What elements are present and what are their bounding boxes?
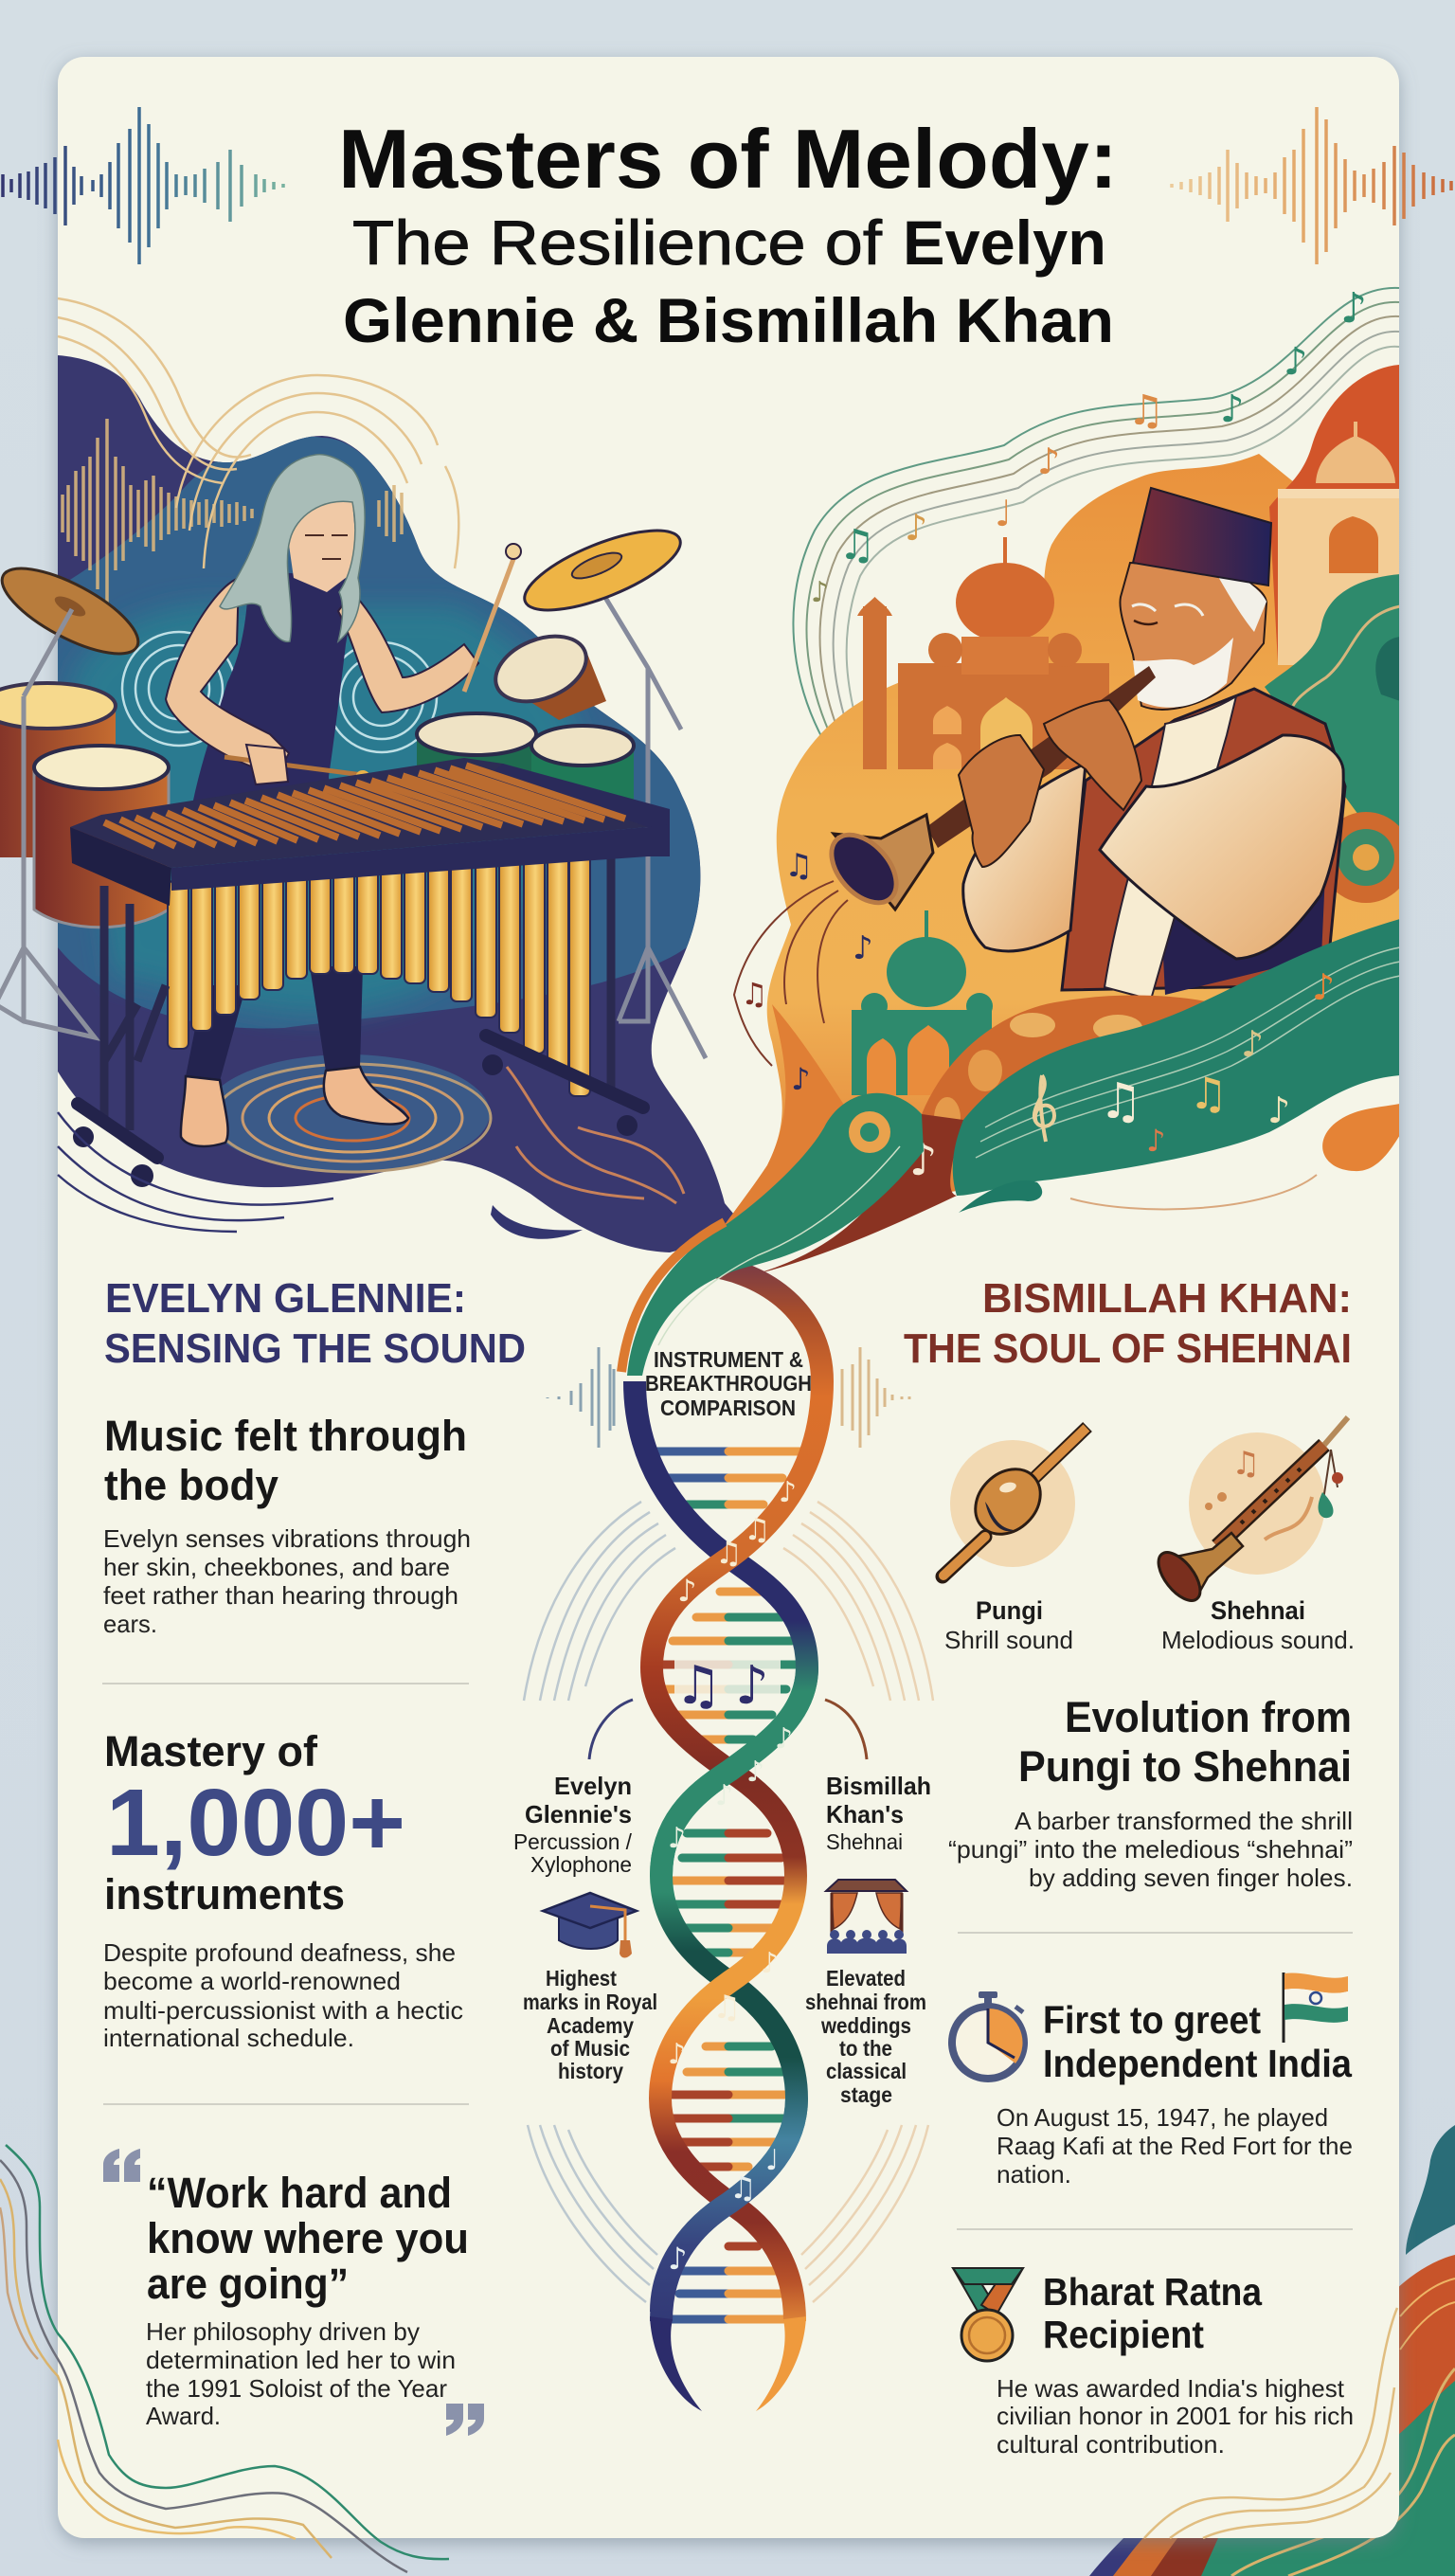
comparison heading: BREAKTHROUGH (645, 1371, 812, 1396)
left waveform (3, 107, 283, 264)
right comparison column: stage (840, 2082, 892, 2107)
music felt through the body: her skin, cheekbones, and bare (103, 1553, 450, 1581)
icon: pungi (943, 1427, 1087, 1576)
left comparison column: of Music (550, 2036, 630, 2061)
music felt through the body (103, 1412, 471, 1638)
independent India: Independent India (1043, 2042, 1352, 2085)
right comparison column (805, 1700, 931, 2107)
sound stream from the bell (734, 881, 848, 1066)
corner ribbons outside the card (1089, 2125, 1455, 2576)
small waveforms (548, 1347, 614, 1448)
title: Glennie & Bismillah Khan (343, 285, 1114, 355)
icon: stopwatch (952, 1991, 1024, 2079)
sound arcs above the blob (58, 298, 458, 568)
right comparison column: Shehnai (826, 1829, 903, 1854)
evolution text: A barber transformed the shrill (1015, 1807, 1353, 1835)
helix rungs (644, 1451, 805, 2319)
quote: Award. (146, 2402, 221, 2430)
waveform inside blob (63, 419, 402, 608)
panel: Evelyn Glennie text (102, 1275, 526, 2436)
heading (104, 1275, 526, 1372)
floating notes: ♫ (838, 521, 875, 569)
flowing ribbons (748, 919, 1400, 1276)
ribbon notes: ♫ (1099, 1073, 1143, 1130)
quote: Her philosophy driven by (146, 2317, 420, 2346)
icon: mortarboard (543, 1893, 637, 1957)
notes on helix (668, 1476, 797, 2277)
illustration: Evelyn Glennie at the marimba (0, 298, 748, 1252)
notes on helix: ♩ (765, 2144, 779, 2177)
comparison heading (645, 1347, 812, 1420)
right temple (1278, 422, 1399, 665)
floating notes: ♫ (1127, 387, 1164, 435)
ribbon notes (909, 966, 1335, 1185)
panel: Bismillah Khan text: Shrill sound (944, 1626, 1073, 1654)
panel: Bismillah Khan text (904, 1275, 1355, 2459)
central navy notes: ♪ (735, 1655, 769, 1717)
left comparison column (513, 1700, 657, 2083)
right comparison column: to the (839, 2036, 892, 2061)
marimba frame and stands (70, 758, 670, 1187)
floating notes: ♪ (811, 576, 829, 609)
icon: shehnai (1151, 1417, 1348, 1608)
blob background (58, 355, 748, 1252)
left comparison column: Glennie's (525, 1800, 632, 1828)
mastery of 1,000+ instruments: international schedule. (103, 2024, 354, 2052)
marimba resonator tubes (168, 843, 590, 1096)
music felt through the body: feet rather than hearing through (103, 1581, 458, 1610)
evolution text: Evolution from (1065, 1693, 1352, 1741)
left comparison column: history (558, 2059, 623, 2083)
music felt through the body: the body (104, 1461, 278, 1509)
Evelyn figure (166, 455, 521, 1146)
independent India: On August 15, 1947, he played (997, 2103, 1328, 2132)
ribbon notes: ♪ (1241, 1023, 1264, 1065)
independent India (952, 1973, 1353, 2189)
left stand (0, 609, 95, 1037)
mastery of 1,000+ instruments (103, 1727, 463, 2052)
title: Evelyn (903, 207, 1106, 278)
left comparison column: Percussion / (513, 1829, 633, 1854)
evolution text (948, 1693, 1353, 1892)
ribbon notes: ♪ (909, 1134, 937, 1185)
notes on helix: ♪ (779, 1476, 797, 1509)
sound arcs around helix (524, 1502, 933, 2302)
notes on helix: ♪ (668, 2038, 686, 2071)
right comparison column: classical (826, 2059, 907, 2083)
right waveform (1172, 107, 1451, 264)
quote: are going” (147, 2260, 349, 2308)
left drums (0, 683, 169, 928)
left comparison column: marks in Royal (523, 1990, 657, 2014)
icon: opening quote marks (103, 2149, 140, 2182)
heading: SENSING THE SOUND (104, 1325, 526, 1372)
heading (904, 1275, 1352, 1372)
floating notes: ♪ (1037, 441, 1060, 482)
notes on helix: ♪ (668, 2241, 687, 2277)
ribbon notes: ♪ (1146, 1123, 1165, 1159)
notes on helix: ♪ (677, 1573, 696, 1609)
icon: stage (826, 1880, 907, 1954)
notes on helix: ♪ (668, 1822, 686, 1855)
Bharat Ratna: Recipient (1043, 2313, 1204, 2356)
right comparison column: Elevated (826, 1966, 906, 1991)
lower-left motion lines (58, 1112, 333, 1232)
Bismillah Khan figure (819, 488, 1345, 1000)
illustration: Bismillah Khan playing the shehnai (720, 284, 1411, 1276)
mastery of 1,000+ instruments: 1,000+ (106, 1770, 405, 1876)
evolution text: Pungi to Shehnai (1018, 1742, 1352, 1791)
quote: determination led her to win (146, 2346, 456, 2374)
notes on helix: ♫ (712, 1989, 741, 2027)
icon: closing quote marks (446, 2404, 484, 2436)
ribbon notes: ♪ (1267, 1090, 1290, 1131)
floating notes (811, 284, 1367, 609)
panel: Bismillah Khan text: Pungi (976, 1596, 1043, 1625)
independent India: nation. (997, 2160, 1071, 2189)
strand A (635, 1381, 807, 2321)
music felt through the body: ears. (103, 1610, 157, 1638)
stream notes (741, 847, 873, 1097)
icon: flag of India (1284, 1973, 1348, 2043)
DNA helix (524, 1093, 933, 2411)
icon: medal (953, 2268, 1023, 2361)
left comparison column: Highest (546, 1966, 617, 1991)
title: The Resilience of (352, 207, 883, 278)
strand B (652, 1265, 822, 2321)
heading: EVELYN GLENNIE: (105, 1275, 466, 1322)
decorative wave lines, bottom left (0, 2145, 449, 2572)
notes on helix: ♫ (715, 1535, 743, 1571)
right comparison column: shehnai from (805, 1990, 926, 2014)
stream notes: ♫ (741, 976, 768, 1012)
marimba wooden bars (104, 766, 625, 846)
ribbon notes: ♫ (1189, 1068, 1228, 1119)
music felt through the body: Music felt through (104, 1412, 467, 1460)
Bharat Ratna: He was awarded India's highest (997, 2374, 1345, 2403)
comparison heading: COMPARISON (660, 1396, 796, 1420)
top strand joining the ribbons (621, 1093, 924, 1376)
notes on helix: ♪ (715, 1779, 733, 1812)
evolution text: “pungi” into the meledious “shehnai” (948, 1835, 1353, 1864)
floating notes: ♪ (1340, 284, 1367, 333)
notes on helix: ♫ (729, 2170, 757, 2206)
right comparison column: weddings (820, 2013, 911, 2038)
right drums and cymbal (417, 514, 706, 1058)
Bharat Ratna (953, 2268, 1354, 2459)
right comparison column: Khan's (826, 1800, 904, 1828)
floating notes: ♪ (905, 507, 927, 549)
quote: the 1991 Soloist of the Year (146, 2374, 447, 2403)
quote: “Work hard and (147, 2169, 452, 2217)
heading: THE SOUL OF SHEHNAI (904, 1325, 1352, 1372)
comparison heading: INSTRUMENT & (654, 1347, 803, 1372)
stream notes: ♪ (853, 929, 873, 967)
left comparison column: Academy (547, 2013, 634, 2038)
notes on helix: ♪ (761, 1947, 779, 1980)
Bharat Ratna: civilian honor in 2001 for his rich (997, 2402, 1354, 2430)
mastery of 1,000+ instruments: instruments (104, 1870, 345, 1918)
helix tails (650, 2316, 702, 2411)
staff lines with notes (793, 288, 1399, 769)
stream notes: ♫ (784, 847, 813, 885)
strand A over-crossings (661, 1667, 807, 1876)
icon: shehnai: ♫ (1231, 1445, 1260, 1483)
central navy notes: ♫ (674, 1655, 722, 1717)
notes on helix: ♪ (746, 1756, 764, 1789)
floating notes: ♩ (995, 493, 1012, 534)
Bharat Ratna: cultural contribution. (997, 2430, 1225, 2459)
mastery of 1,000+ instruments: become a world-renowned (103, 1967, 401, 1995)
right green wave (1265, 574, 1411, 903)
quote: know where you (147, 2214, 469, 2262)
central navy notes (674, 1653, 781, 1717)
title (3, 107, 1451, 355)
independent India: First to greet (1043, 1998, 1261, 2042)
notes on helix: ♫ (744, 1511, 771, 1547)
fort silhouette (857, 537, 1109, 769)
panel: Bismillah Khan text: Shehnai (1211, 1596, 1305, 1625)
teal mosque (852, 910, 993, 1095)
ribbon notes: ♪ (1312, 966, 1335, 1008)
mastery of 1,000+ instruments: Despite profound deafness, she (103, 1938, 456, 1967)
floating notes: ♪ (1284, 340, 1308, 384)
independent India: Raag Kafi at the Red Fort for the (997, 2132, 1353, 2160)
notes on helix: ♪ (775, 1722, 793, 1756)
orange background shapes (720, 365, 1400, 1232)
right comparison column: Bismillah (826, 1772, 931, 1800)
mastery of 1,000+ instruments: multi-percussionist with a hectic (103, 1996, 463, 2025)
evolution text: by adding seven finger holes. (1029, 1864, 1353, 1892)
title: Masters of Melody: (338, 112, 1118, 206)
floating notes: ♪ (1220, 387, 1245, 431)
heading: BISMILLAH KHAN: (982, 1275, 1352, 1322)
left comparison column: Evelyn (554, 1772, 632, 1800)
treble clef (1034, 1075, 1054, 1142)
vibration circles (122, 632, 437, 752)
panel: Bismillah Khan text: Melodious sound. (1161, 1626, 1355, 1654)
mastery of 1,000+ instruments: Mastery of (104, 1727, 318, 1775)
Bharat Ratna: Bharat Ratna (1043, 2270, 1262, 2314)
music felt through the body: Evelyn senses vibrations through (103, 1524, 471, 1553)
floor ripples (214, 1064, 684, 1203)
left comparison column: Xylophone (530, 1852, 632, 1877)
quote (103, 2149, 484, 2436)
left cymbal (0, 552, 150, 670)
stream notes: ♪ (791, 1061, 810, 1097)
decorative wave lines, bottom right corner (1144, 2308, 1397, 2538)
